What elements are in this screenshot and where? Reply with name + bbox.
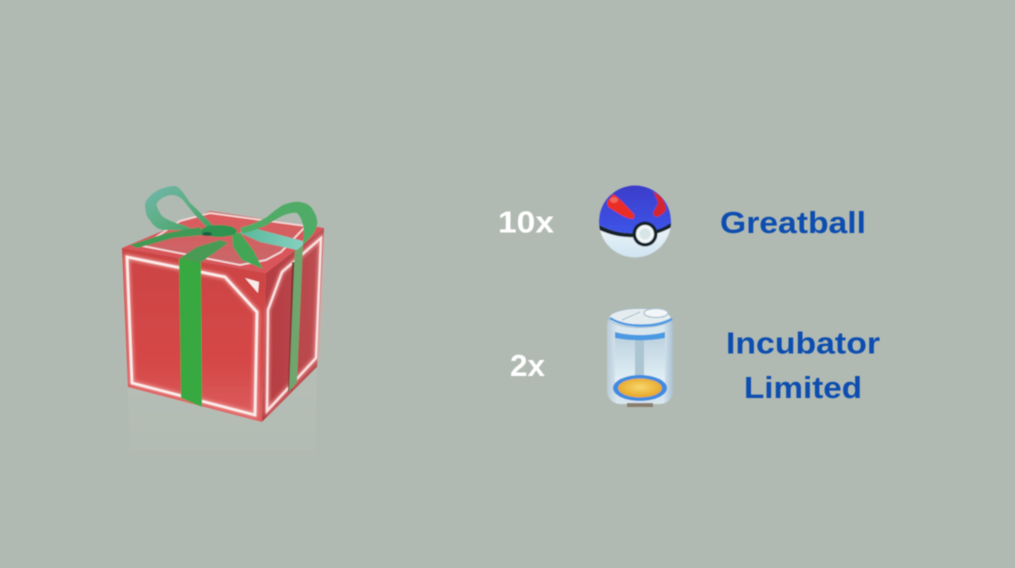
ball button [632, 222, 658, 246]
infographic canvas [121, 184, 880, 422]
bow: right loop [240, 202, 317, 245]
illustration: gift box [122, 186, 324, 450]
ball right red stripe [653, 192, 666, 217]
bow: left loop [145, 186, 215, 231]
gift box front face [122, 248, 266, 422]
ball band [597, 221, 674, 237]
icon: incubator [607, 308, 673, 407]
bow: knot [201, 225, 237, 237]
gift box floor reflection [128, 367, 317, 450]
bow: back right ribbon [240, 226, 303, 250]
row 2 label [726, 326, 880, 405]
row 1 quantity: 10x [498, 204, 555, 240]
incubator gold plate [618, 378, 662, 398]
label line 2: Limited [744, 370, 862, 405]
icon: great ball [597, 183, 674, 261]
incubator foot [627, 403, 653, 407]
incubator glass [615, 336, 665, 390]
row 2 quantity: 2x [510, 348, 546, 383]
incubator blue ring [615, 332, 665, 340]
row 1 label: Greatball [720, 205, 866, 240]
top ribbon band [180, 240, 228, 263]
ball left red stripe [607, 194, 634, 219]
bow: left tail [130, 227, 203, 248]
side ribbon shadow [288, 262, 295, 392]
ball upper shell [597, 183, 674, 233]
ball lower shell [598, 226, 672, 258]
gift box corner marker [245, 278, 259, 293]
incubator lid [609, 308, 671, 328]
incubator centre column [635, 338, 644, 376]
gift box side face [262, 228, 324, 422]
side ribbon [289, 245, 303, 392]
incubator shell [607, 312, 673, 404]
incubator base ring [613, 375, 667, 401]
front ribbon [179, 258, 202, 407]
gift box top face [122, 211, 324, 273]
label line 1: Incubator [726, 326, 880, 360]
bow: right tail [232, 233, 263, 269]
